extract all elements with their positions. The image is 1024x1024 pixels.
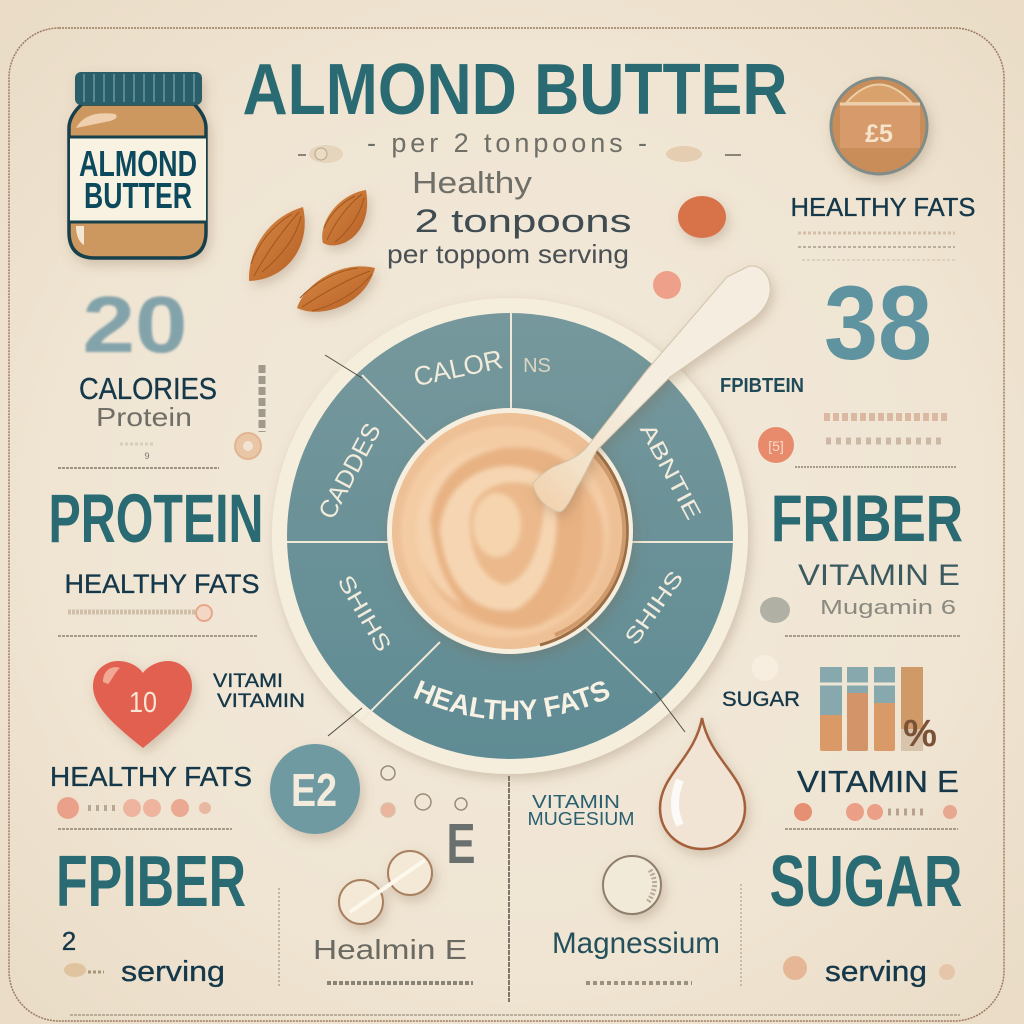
icon: drop (660, 718, 745, 849)
icon: heart (93, 661, 192, 748)
jar icon (69, 72, 206, 258)
small icons (381, 766, 467, 817)
label: sugar small: SUGAR (722, 688, 800, 711)
subtitle (298, 128, 741, 163)
wheel: CADDES (313, 419, 387, 524)
bowl of almond butter (387, 408, 633, 654)
intro text: per toppom serving (387, 239, 629, 269)
intro text: Healthy (412, 165, 533, 200)
label: magnesium: Magnessium (552, 927, 720, 960)
icon: almonds (249, 190, 375, 312)
heading: sugar: SUGAR (770, 842, 962, 922)
vertical tiny label and dot (235, 365, 262, 459)
small text lines right top (798, 233, 955, 260)
number 38: 38 (824, 265, 932, 382)
letter E: E (446, 812, 476, 876)
label: vitamin E: Healmin E (313, 934, 467, 965)
dotted divider left (278, 888, 280, 987)
wheel (270, 303, 756, 784)
icon: coin 15 (831, 78, 927, 174)
badge E2: E2 (291, 764, 337, 816)
label: vitamin: VITAMI (213, 671, 283, 692)
icon: spoon (533, 266, 770, 512)
label: protein small: FPIBTEIN (720, 375, 804, 397)
small lines left (58, 605, 258, 636)
small dot (752, 655, 778, 681)
orange badge and lines: [5] (768, 438, 784, 454)
vertical dotted divider (740, 884, 742, 988)
serving left (62, 926, 243, 988)
lines and serving right (783, 926, 955, 988)
badge E2 (270, 744, 360, 834)
heading: protein: PROTEIN (48, 480, 264, 557)
icon: small dot (653, 271, 681, 299)
vitamin E right: VITAMIN E (798, 559, 960, 592)
wheel: HEALTHY FATS (414, 680, 610, 720)
label: protein: Protein (96, 402, 192, 432)
label: vitamin magnesium: MUGESIUM (528, 809, 634, 829)
label: vitamin: VITAMIN (217, 691, 305, 712)
title: ALMOND BUTTER (242, 50, 788, 130)
icon: coin 15: £5 (865, 120, 893, 148)
wheel: SHIHS (620, 566, 688, 649)
heading: healthy fats right: HEALTHY FATS (790, 192, 976, 222)
icon: small almond (678, 196, 726, 238)
tiny line (586, 981, 692, 985)
wheel: SHIHS (333, 571, 396, 656)
lines lower right (785, 803, 958, 829)
segment labels: CALOR (411, 344, 505, 392)
lines lower left (57, 797, 232, 829)
heading: healthy fats left: HEALTHY FATS (64, 569, 260, 599)
heading: calories: CALORIES (79, 371, 217, 406)
bar chart: % (903, 713, 937, 755)
lines and serving right: serving (825, 956, 927, 988)
subtitle: - per 2 tonpoons - (367, 128, 647, 158)
wheel: ABNTIE (635, 419, 706, 524)
heading: fiber left: FPIBER (56, 842, 246, 922)
jar icon: ALMOND (79, 143, 197, 184)
vitamin E lower right: VITAMIN E (797, 764, 959, 799)
magnesium right: Mugamin 6 (820, 597, 956, 619)
orange badge and lines (758, 417, 957, 467)
intro text (387, 165, 632, 269)
divider (508, 776, 510, 1002)
magnesium right (760, 597, 960, 636)
tiny line (327, 981, 473, 985)
heading: healthy fats lower: HEALTHY FATS (50, 761, 252, 792)
label: vitamin magnesium (528, 792, 634, 829)
bar chart (820, 667, 937, 755)
tiny note left: 9 (144, 451, 150, 461)
serving left: 2 (62, 926, 76, 956)
icon: heart: 10 (129, 687, 157, 719)
intro text: 2 tonpoons (414, 203, 632, 239)
icon: tablets (339, 851, 432, 924)
label: vitamin (213, 671, 305, 712)
heading: fiber right: FRIBER (771, 481, 963, 555)
jar icon: BUTTER (84, 175, 192, 216)
icon: magnesium ball (603, 856, 661, 914)
label: vitamin magnesium: VITAMIN (532, 792, 620, 812)
wheel: NS (523, 355, 551, 377)
number 20: 20 (82, 280, 188, 369)
serving left: serving (121, 956, 225, 988)
bottom border line (70, 1014, 960, 1016)
